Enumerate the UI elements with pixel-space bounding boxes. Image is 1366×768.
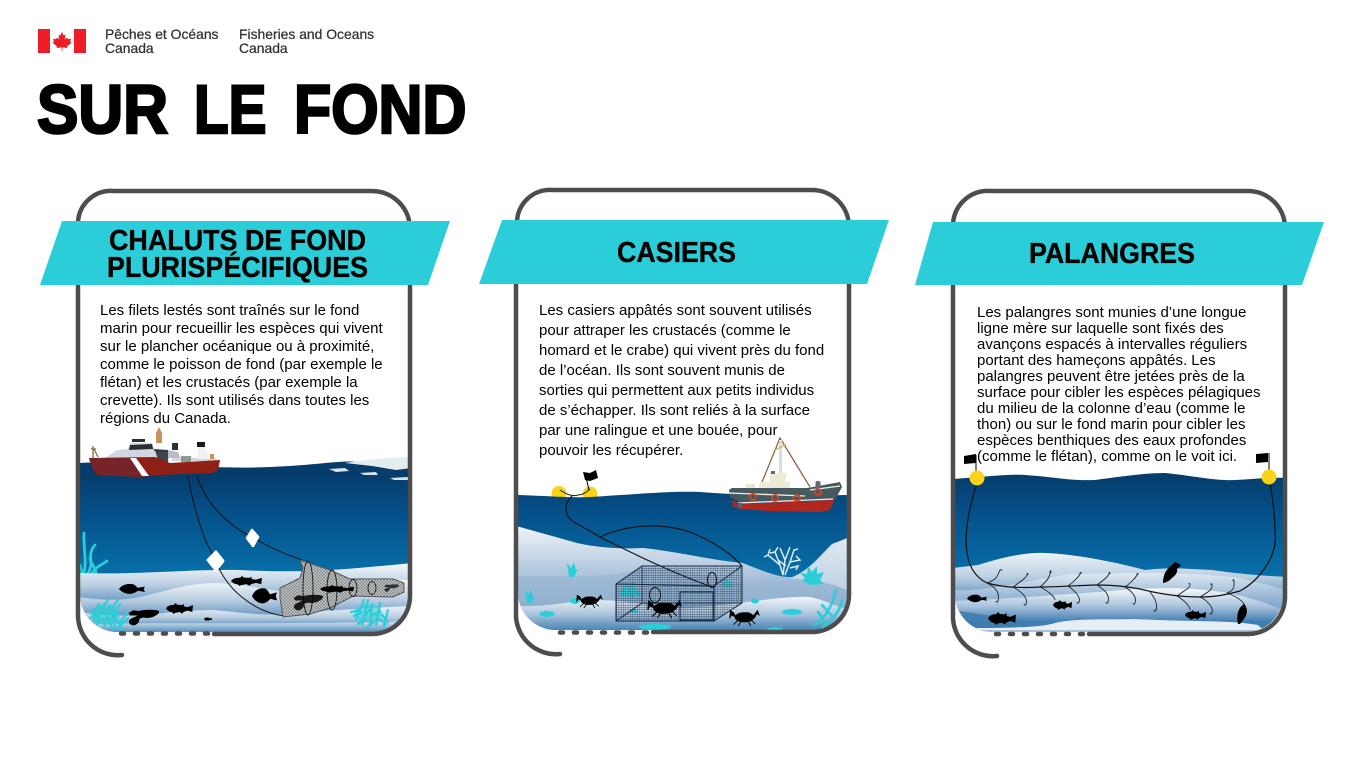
buoy line and rope bbox=[566, 495, 742, 587]
fish and crustaceans bbox=[119, 576, 277, 625]
heading: PLURISPÉCIFIQUES bbox=[107, 252, 368, 284]
body text: du milieu de la colonne d’eau (comme le bbox=[977, 400, 1245, 417]
pale rock highlight bbox=[790, 549, 847, 590]
scene: traps bbox=[516, 486, 850, 640]
body text: de l’océan. Ils sont souvent munis de bbox=[539, 362, 785, 379]
government of Canada signature bbox=[38, 26, 374, 56]
panel: palangres bbox=[915, 191, 1324, 656]
body text: de s’échapper. Ils sont reliés à la surface bbox=[539, 402, 810, 419]
body text: surface pour cibler les espèces pélagiques bbox=[977, 384, 1260, 401]
icon: Canadian flag bbox=[38, 29, 86, 53]
body text: Les palangres sont munies d’une longue bbox=[977, 304, 1246, 321]
lobster trap bbox=[616, 566, 742, 621]
ocean water bbox=[953, 473, 1287, 640]
panel: chaluts de fond bbox=[40, 191, 450, 655]
title: LE bbox=[194, 71, 266, 148]
body text: flétan) et les crustacés (par exemple la bbox=[100, 374, 358, 391]
title bbox=[37, 71, 466, 148]
scene: longline bbox=[953, 473, 1287, 640]
body text: sorties qui permettent aux petits individus bbox=[539, 382, 814, 399]
English department name: Canada bbox=[239, 40, 288, 56]
ice floes bbox=[329, 457, 412, 480]
body text: Les filets lestés sont traînés sur le fond bbox=[100, 302, 359, 319]
body text: par une ralingue et une bouée, pour bbox=[539, 422, 778, 439]
card outline bbox=[78, 191, 410, 655]
panel: casiers bbox=[479, 190, 889, 654]
sea floor bbox=[955, 552, 1283, 632]
ocean water bbox=[78, 462, 412, 640]
trawl cables and floats bbox=[188, 476, 302, 616]
heading banner bbox=[40, 221, 450, 285]
body text: (comme le flétan), comme on le voit ici. bbox=[977, 448, 1237, 465]
icon: yellow buoys bbox=[552, 486, 598, 498]
heading bbox=[107, 225, 368, 284]
heading banner bbox=[915, 222, 1324, 285]
buoys and flags bbox=[964, 453, 1276, 486]
icon: coast guard ship bbox=[89, 427, 220, 477]
longline bbox=[966, 483, 1275, 614]
card outline bbox=[953, 191, 1285, 656]
body text: pouvoir les récupérer. bbox=[539, 442, 683, 459]
heading: PALANGRES bbox=[1029, 238, 1195, 270]
white coral bbox=[764, 547, 800, 575]
English department name: Fisheries and Oceans bbox=[239, 26, 374, 42]
trawl net bbox=[280, 560, 404, 617]
crabs bbox=[577, 595, 759, 626]
ocean water bbox=[516, 492, 850, 640]
body text: homard et le crabe) qui vivent près du fond bbox=[539, 342, 824, 359]
body text: crevette). Ils sont utilisés dans toutes les bbox=[100, 392, 369, 409]
body text: thon) ou sur le fond marin pour cibler les bbox=[977, 416, 1245, 433]
lower snoods and hooks bbox=[987, 583, 1245, 614]
heading banner bbox=[479, 220, 889, 284]
body text: pour attraper les crustacés (comme le bbox=[539, 322, 791, 339]
title: FOND bbox=[294, 71, 466, 148]
upper snoods and hooks bbox=[987, 570, 1234, 597]
body text: ligne mère sur laquelle sont fixés des bbox=[977, 320, 1224, 337]
title: SUR bbox=[37, 71, 168, 148]
teal rocks and plants bbox=[525, 562, 824, 633]
body text: portant des hameçons appâtés. Les bbox=[977, 352, 1216, 369]
body text: palangres peuvent être jetées près de la bbox=[977, 368, 1245, 385]
French department name: Canada bbox=[105, 40, 154, 56]
body text: sur le plancher océanique ou à proximité, bbox=[100, 338, 374, 355]
body text: régions du Canada. bbox=[100, 410, 231, 427]
sea floor bbox=[80, 563, 408, 632]
scene: bottom trawl bbox=[78, 457, 412, 640]
icon: buoy flag bbox=[560, 470, 598, 496]
coral left bbox=[87, 600, 128, 630]
float bbox=[247, 530, 258, 546]
body text: Les casiers appâtés sont souvent utilisés bbox=[539, 302, 812, 319]
body text: comme le poisson de fond (par exemple le bbox=[100, 356, 383, 373]
card outline bbox=[516, 190, 849, 654]
fish on hooks bbox=[967, 562, 1247, 625]
float bbox=[208, 552, 223, 570]
coral right bbox=[351, 600, 388, 628]
kelp bbox=[815, 590, 842, 628]
sea floor bbox=[518, 526, 847, 630]
icon: fishing boat bbox=[729, 438, 842, 512]
kelp bbox=[80, 533, 107, 573]
heading: CHALUTS DE FOND bbox=[109, 225, 366, 257]
body text: avançons espacés à intervalles réguliers bbox=[977, 336, 1247, 353]
body text: marin pour recueillir les espèces qui vivent bbox=[100, 320, 383, 337]
body text: espèces benthiques des eaux profondes bbox=[977, 432, 1246, 449]
heading: CASIERS bbox=[617, 237, 736, 269]
French department name: Pêches et Océans bbox=[105, 26, 219, 42]
